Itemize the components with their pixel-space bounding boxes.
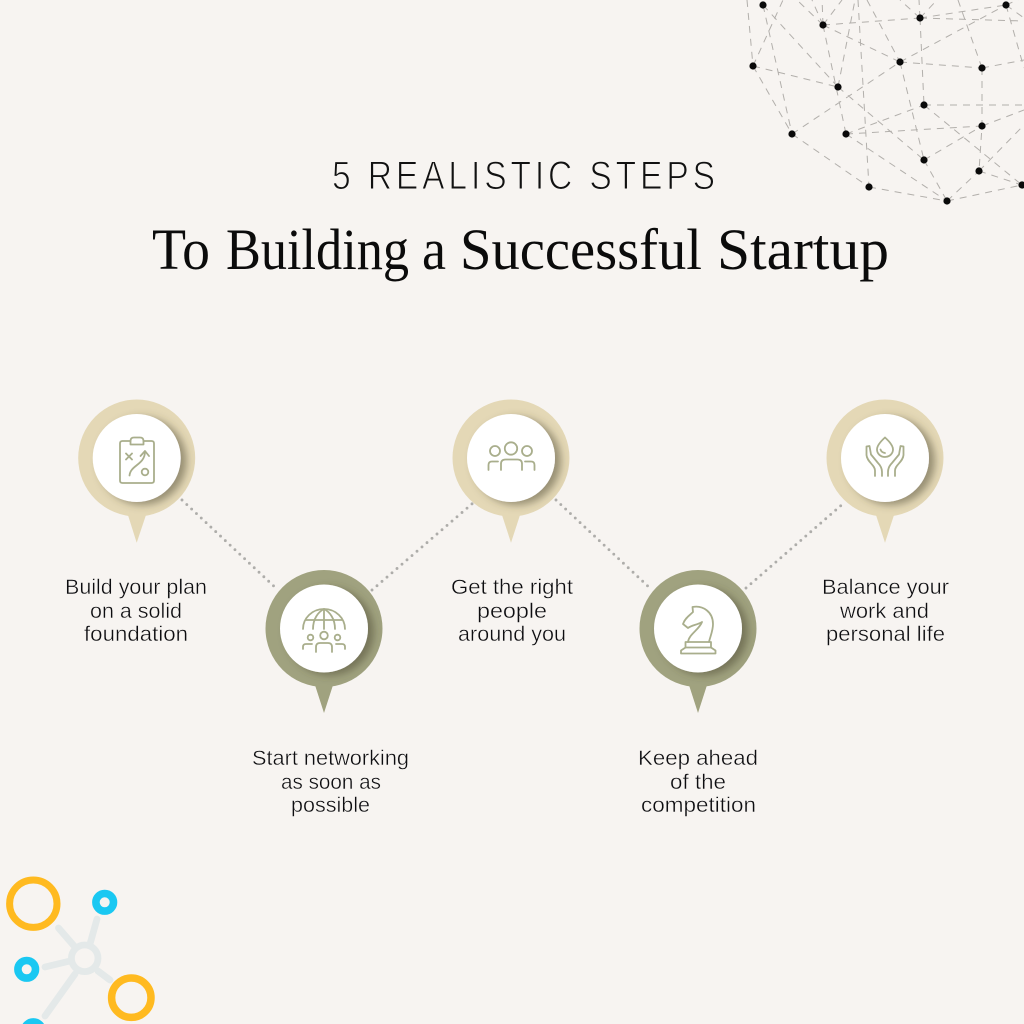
dotted connectors bbox=[182, 500, 845, 590]
title: Startup bbox=[717, 217, 889, 282]
step 1: build your plan bbox=[65, 400, 207, 646]
title bbox=[152, 217, 889, 282]
icon: hands holding a drop bbox=[866, 438, 904, 476]
label 4: of the bbox=[670, 771, 726, 794]
label 3: Get the right bbox=[451, 576, 573, 599]
label 4: competition bbox=[641, 794, 756, 817]
label 1: Build your plan bbox=[65, 576, 207, 599]
title: To bbox=[152, 217, 210, 282]
subtitle: 5 REALISTIC STEPS bbox=[332, 153, 715, 198]
icon: clipboard strategy bbox=[120, 438, 154, 483]
label 2: Start networking bbox=[252, 747, 409, 770]
pin 3 bbox=[452, 400, 570, 543]
step 2: start networking bbox=[252, 570, 409, 817]
label 2: possible bbox=[291, 794, 370, 817]
title: a bbox=[422, 217, 446, 282]
icon: globe and people bbox=[303, 609, 345, 652]
label 3: around you bbox=[458, 623, 566, 646]
pin 4 bbox=[640, 570, 756, 713]
label 5 bbox=[822, 576, 949, 646]
label 1: on a solid bbox=[90, 600, 182, 623]
title: Building bbox=[226, 217, 409, 282]
step 5: balance bbox=[822, 400, 949, 646]
pin 1 bbox=[78, 400, 195, 543]
label 5: work and bbox=[839, 600, 929, 623]
pin 2 bbox=[266, 570, 382, 713]
step 3: get the right people bbox=[451, 400, 573, 646]
title: Successful bbox=[460, 217, 702, 282]
label 3: people bbox=[477, 600, 547, 623]
icon: group of people bbox=[488, 442, 534, 470]
molecule decoration bbox=[10, 880, 151, 1024]
label 4 bbox=[638, 747, 758, 817]
label 5: personal life bbox=[826, 623, 945, 646]
label 1 bbox=[65, 576, 207, 646]
pin 5 bbox=[826, 400, 944, 543]
icon: chess knight bbox=[681, 607, 716, 654]
label 5: Balance your bbox=[822, 576, 949, 599]
label 2: as soon as bbox=[281, 771, 381, 794]
network globe decoration bbox=[747, 0, 1024, 205]
label 1: foundation bbox=[84, 623, 188, 646]
step 4: keep ahead bbox=[638, 570, 758, 817]
label 2 bbox=[252, 747, 409, 817]
label 4: Keep ahead bbox=[638, 747, 758, 770]
label 3 bbox=[451, 576, 573, 646]
